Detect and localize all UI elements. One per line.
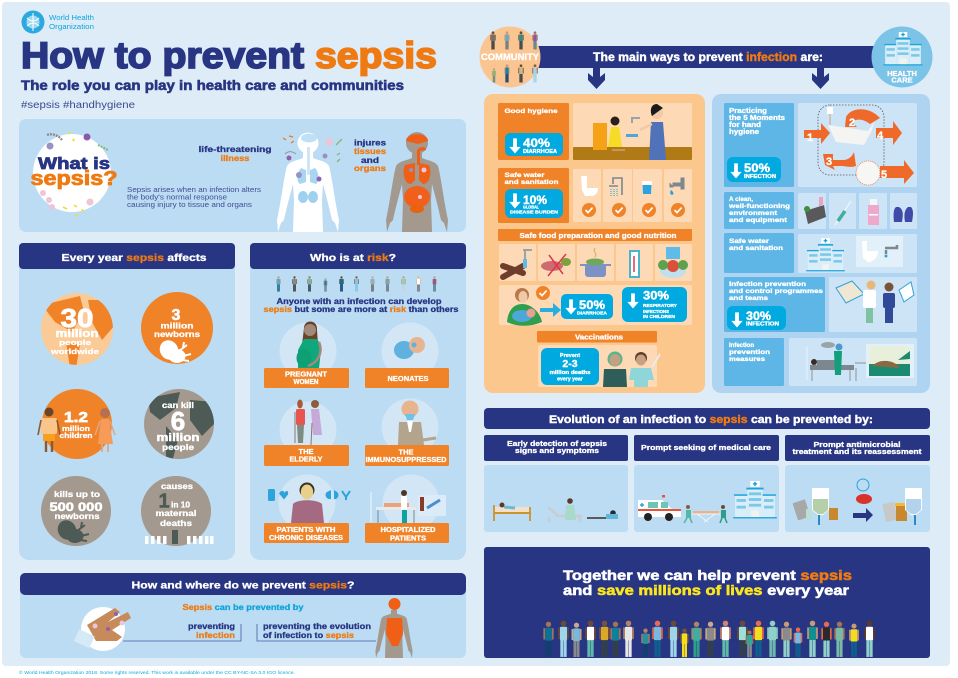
community circle [480,26,540,88]
icon: reassessed treatment [882,488,922,525]
stat: 30 million people worldwide: 30 [60,303,94,333]
label: life-threatening illness [198,144,272,163]
stat: can kill 6 million people: can kill [162,401,194,410]
ipc programmes box: and control programmes [729,288,823,295]
white body with germs [277,132,342,232]
infection prevention measures box [724,338,784,386]
vaccinations heading [537,331,657,342]
safe water and sanitation box: and sanitation [729,245,783,252]
good hygiene box: DIARRHOEA [523,149,557,155]
icon: hand with germs [74,607,131,651]
stat pill: 30% respiratory infections: RESPIRATORY [643,303,677,308]
clean environment box: and equipment [729,217,788,224]
stat pill: 30% respiratory infections: 30% [643,288,669,302]
infection prevention measures box: Infection [729,342,754,349]
vaccinations panel [538,345,660,387]
stat: 3 million newborns: million [160,322,194,330]
icon: clock and pill [856,479,872,504]
column: prompt seeking of medical care: Prompt seeking of medical care [641,443,771,452]
text: preventing the evolution: of infection to sepsis [263,630,354,640]
risk group: the immunosuppressed: THE [398,450,414,456]
evolution heading [484,408,930,429]
hand hygiene box: hygiene [729,129,759,136]
title: How to prevent sepsis [21,35,437,76]
risk group: pregnant women: WOMEN [294,379,318,386]
WHO logo: World Health [49,13,94,22]
stat: 1.2 million children: million [62,424,90,433]
column: early detection [19,435,930,675]
description: Sepsis arises when an infection alters [127,186,262,194]
header [20,573,466,595]
infection prevention measures box: prevention [729,349,770,356]
five moments diagram [798,103,917,187]
footer copyright: © World Health Organization 2018. Some rights reserved. This work is available under the CC BY-NC-SA 3.0 IGO licence. [19,669,295,675]
team picture [829,277,917,332]
moment arrow 3 [823,152,856,170]
five moments diagram: 5 [881,169,887,181]
good hygiene box: Good hygiene [504,108,558,115]
safe water and sanitation box [724,233,794,273]
risk group: the elderly [264,400,349,466]
main ways header bar [530,46,890,68]
column: prompt antimicrobial treatment: Prompt antimicrobial [814,440,900,449]
stat pill: 30% respiratory infections: IN CHILDREN [643,314,675,319]
stat: 30 million people worldwide: worldwide [50,347,99,356]
health care circle [872,26,932,88]
food icon tiles [499,244,692,281]
risk group: neonates [365,322,449,388]
moment arrow 5 [880,160,914,184]
label: life-threatening illness: illness [220,153,250,163]
vaccinations panel: million deaths [550,370,591,376]
ipc programmes box: Infection prevention [729,281,806,288]
icon: patient in bed [494,502,531,521]
banner message: and save millions of lives every year [563,583,850,599]
text: preventing infection [188,621,235,640]
clean environment box: well-functioning [728,203,790,210]
risk group: patients with chronic diseases: CHRONIC DISEASES [269,535,343,542]
stat: 1.2 million children: children [60,431,93,440]
food heading bar: Safe food preparation and good nutrition [520,231,676,240]
ipc programmes box [724,277,825,332]
stat: 1.2 million children [38,389,115,459]
label: injures tissues and organs: organs [354,163,386,173]
risk group: the elderly: ELDERLY [290,456,323,464]
clean environment box: A clean, [729,196,753,203]
risk group: hospitalized patients [365,474,449,543]
WHO logo: Organization [49,22,94,31]
hand hygiene box: INFECTION [744,174,776,180]
hand hygiene box: Practicing [729,108,767,115]
row of people [276,276,437,292]
safe water box: DISEASE BURDEN [510,210,559,216]
clean environment box: environment [729,210,778,217]
stat: causes 1 in 10 maternal deaths: causes [161,482,194,491]
risk group: pregnant women [264,321,349,388]
risk group: patients with chronic diseases [264,474,350,543]
stat: causes 1 in 10 maternal deaths: deaths [160,519,193,528]
bracket: evolution [257,624,376,641]
panel: health care [712,94,930,393]
vaccinations panel: every year [557,376,583,382]
stat: 30 million people worldwide: million [56,328,99,340]
banner message [563,568,852,599]
header [19,243,235,269]
icon: boy [38,408,60,452]
stat: causes 1 in 10 maternal deaths: in 10 [171,500,191,510]
vaccinations panel: Prevent [560,353,580,359]
ipc programmes box: 30% [746,309,771,323]
icon: first treatment [793,488,838,525]
stat pill: 50% diarrhoea: 50% [579,298,605,312]
icon: mother and health worker [603,352,660,387]
description: causing injury to tissue and organs [127,201,253,209]
surgery picture [789,338,917,386]
arrow: treatment change [853,508,873,522]
subtitle: The role you can play in health care and communities [21,77,404,93]
moment arrow 1 [804,123,830,144]
stat pill: 30% respiratory infections: INFECTIONS [643,309,669,314]
arrow: to health care [812,68,829,89]
header: How and where do we prevent sepsis ? [132,580,354,592]
crowd of people [543,621,875,657]
main ways header bar: The main ways to prevent infection are: [593,52,823,64]
column: early detection: signs and symptoms [515,446,599,455]
hand hygiene box: 50% [744,161,770,175]
label: life-threatening illness: life-threatening [198,144,272,154]
stat: 30 million people worldwide [41,293,115,368]
vaccinations heading: Vaccinations [575,332,623,342]
stat: 1.2 million children: 1.2 [64,409,88,426]
text: preventing infection: preventing [188,621,235,631]
grey body with inflamed organs [386,132,448,232]
risk group: hospitalized patients: PATIENTS [390,536,426,542]
stat: kills up to 500 000 newborns: newborns [54,512,100,521]
column: prompt antimicrobial treatment: treatment and its reassessment [792,447,922,456]
evolution heading: Evolution of an infection to sepsis can be prevented by: [549,414,873,426]
label: injures tissues and organs: tissues [354,146,386,156]
text: preventing the evolution: preventing the evolution [263,621,371,631]
stat pill: 50% diarrhoea [561,294,613,319]
together banner [484,547,930,658]
arrow: to community [588,68,605,89]
hospital and toilet picture [798,234,917,273]
risk group: the immunosuppressed [365,398,449,466]
safe water box: Safe water [504,172,545,179]
five moments diagram: 3 [826,156,832,168]
hand hygiene box: the 5 Moments [729,115,785,122]
moment arrow 2 [845,109,880,127]
five moments diagram: 2 [849,117,855,129]
stat: kills up to 500 000 newborns: kills up to [54,490,100,499]
icon: stretcher team [684,505,727,523]
safe water box [498,168,569,223]
label: injures tissues and organs: injures [354,138,386,148]
moment arrow 4 [876,121,902,145]
panel: who is at risk [250,243,466,560]
stat: can kill 6 million people [144,389,216,462]
panel: what is sepsis [19,119,466,232]
good hygiene box [498,103,569,160]
stat: can kill 6 million people: 6 [171,406,185,436]
panel: how and where do we prevent sepsis [20,573,466,658]
risk group: neonates: NEONATES [388,376,429,383]
infection prevention measures box: measures [729,356,765,363]
subheading: Sepsis can be prevented by [182,603,304,612]
germ circle [33,132,111,216]
description [127,186,262,209]
ipc programmes box: INFECTION [746,322,779,328]
stat: 3 million newborns: newborns [154,330,201,339]
intro text [264,296,459,314]
icon: girl [95,408,115,452]
food heading bar [498,229,692,241]
water icon tiles [573,169,692,222]
safe water box: and sanitation [504,179,558,186]
vaccinations panel: 2-3 [562,358,578,370]
breastfeeding panel [499,285,692,326]
handwashing picture [573,103,692,160]
ipc programmes box: and teams [729,295,768,302]
banner message: Together we can help prevent sepsis [563,568,852,584]
WHO logo [22,10,94,34]
header: Who is at risk ? [310,252,396,264]
text: preventing infection: infection [196,630,235,640]
stat: can kill 6 million people: million [156,432,200,444]
stat pill: 30% respiratory infections [622,287,687,322]
stat pill: 50% diarrhoea: DIARRHOEA [577,310,608,316]
icon: hospital [733,481,777,518]
panel: community [484,94,705,393]
text: preventing the evolution [263,621,371,640]
hand hygiene box: for hand [729,122,761,129]
stat: 3 million newborns [141,292,213,364]
health care circle: CARE [891,76,913,84]
heading: what is: What is [38,154,110,173]
safe water box: GLOBAL [523,204,539,210]
safe water box: 10% [523,193,547,207]
bracket: infection [123,624,241,641]
stat: can kill 6 million people: people [162,443,195,452]
stat: kills up to 500 000 newborns: 500 000 [50,502,102,514]
intro text: sepsis but some are more at risk than others [264,304,459,314]
risk group: the elderly: THE [298,449,314,456]
safe water and sanitation box: Safe water [729,238,769,245]
equipment tiles [798,193,917,229]
icon: ambulance [638,495,681,521]
icon: body with organs [375,598,413,658]
clean environment box [724,192,794,229]
stat: 3 million newborns: 3 [172,307,181,324]
stat: 30 million people worldwide: people [59,338,91,347]
risk group: hospitalized patients: HOSPITALIZED [380,527,436,534]
column: early detection: Early detection of sepsis [507,439,607,448]
column: prompt antimicrobial treatment [785,435,930,532]
stat: causes 1 in 10 maternal deaths: 1 [158,490,170,512]
label: injures tissues and organs: and [361,155,379,165]
risk group: the immunosuppressed: IMMUNOSUPPRESSED [366,457,446,464]
heading: sepsis?: sepsis? [30,168,118,190]
hashtags: #sepsis #handhygiene [21,100,135,111]
five moments diagram: 4 [877,130,884,142]
stat: causes 1 in 10 maternal deaths: maternal [156,509,196,518]
label: injures tissues and organs [354,138,386,173]
stat: causes 1 in 10 maternal deaths [141,476,214,546]
community circle: COMMUNITY [481,52,539,62]
hand hygiene box [724,103,794,187]
panel: every year sepsis affects [19,243,235,560]
header: Every year sepsis affects [62,253,207,264]
stat: kills up to 500 000 newborns [41,476,111,546]
column: prompt seeking of medical care [634,435,779,532]
description: the body's normal response [127,194,227,202]
risk group: pregnant women: PREGNANT [285,372,328,378]
icon: sick patient and collapsed person [548,498,618,522]
good hygiene box: 40% [523,136,550,150]
five moments diagram: 1 [807,132,813,144]
intro text: Anyone with an infection can develop [276,296,442,306]
risk group: patients with chronic diseases: PATIENTS WITH [276,527,336,534]
header [250,243,466,269]
health care circle: HEALTH [887,69,917,78]
